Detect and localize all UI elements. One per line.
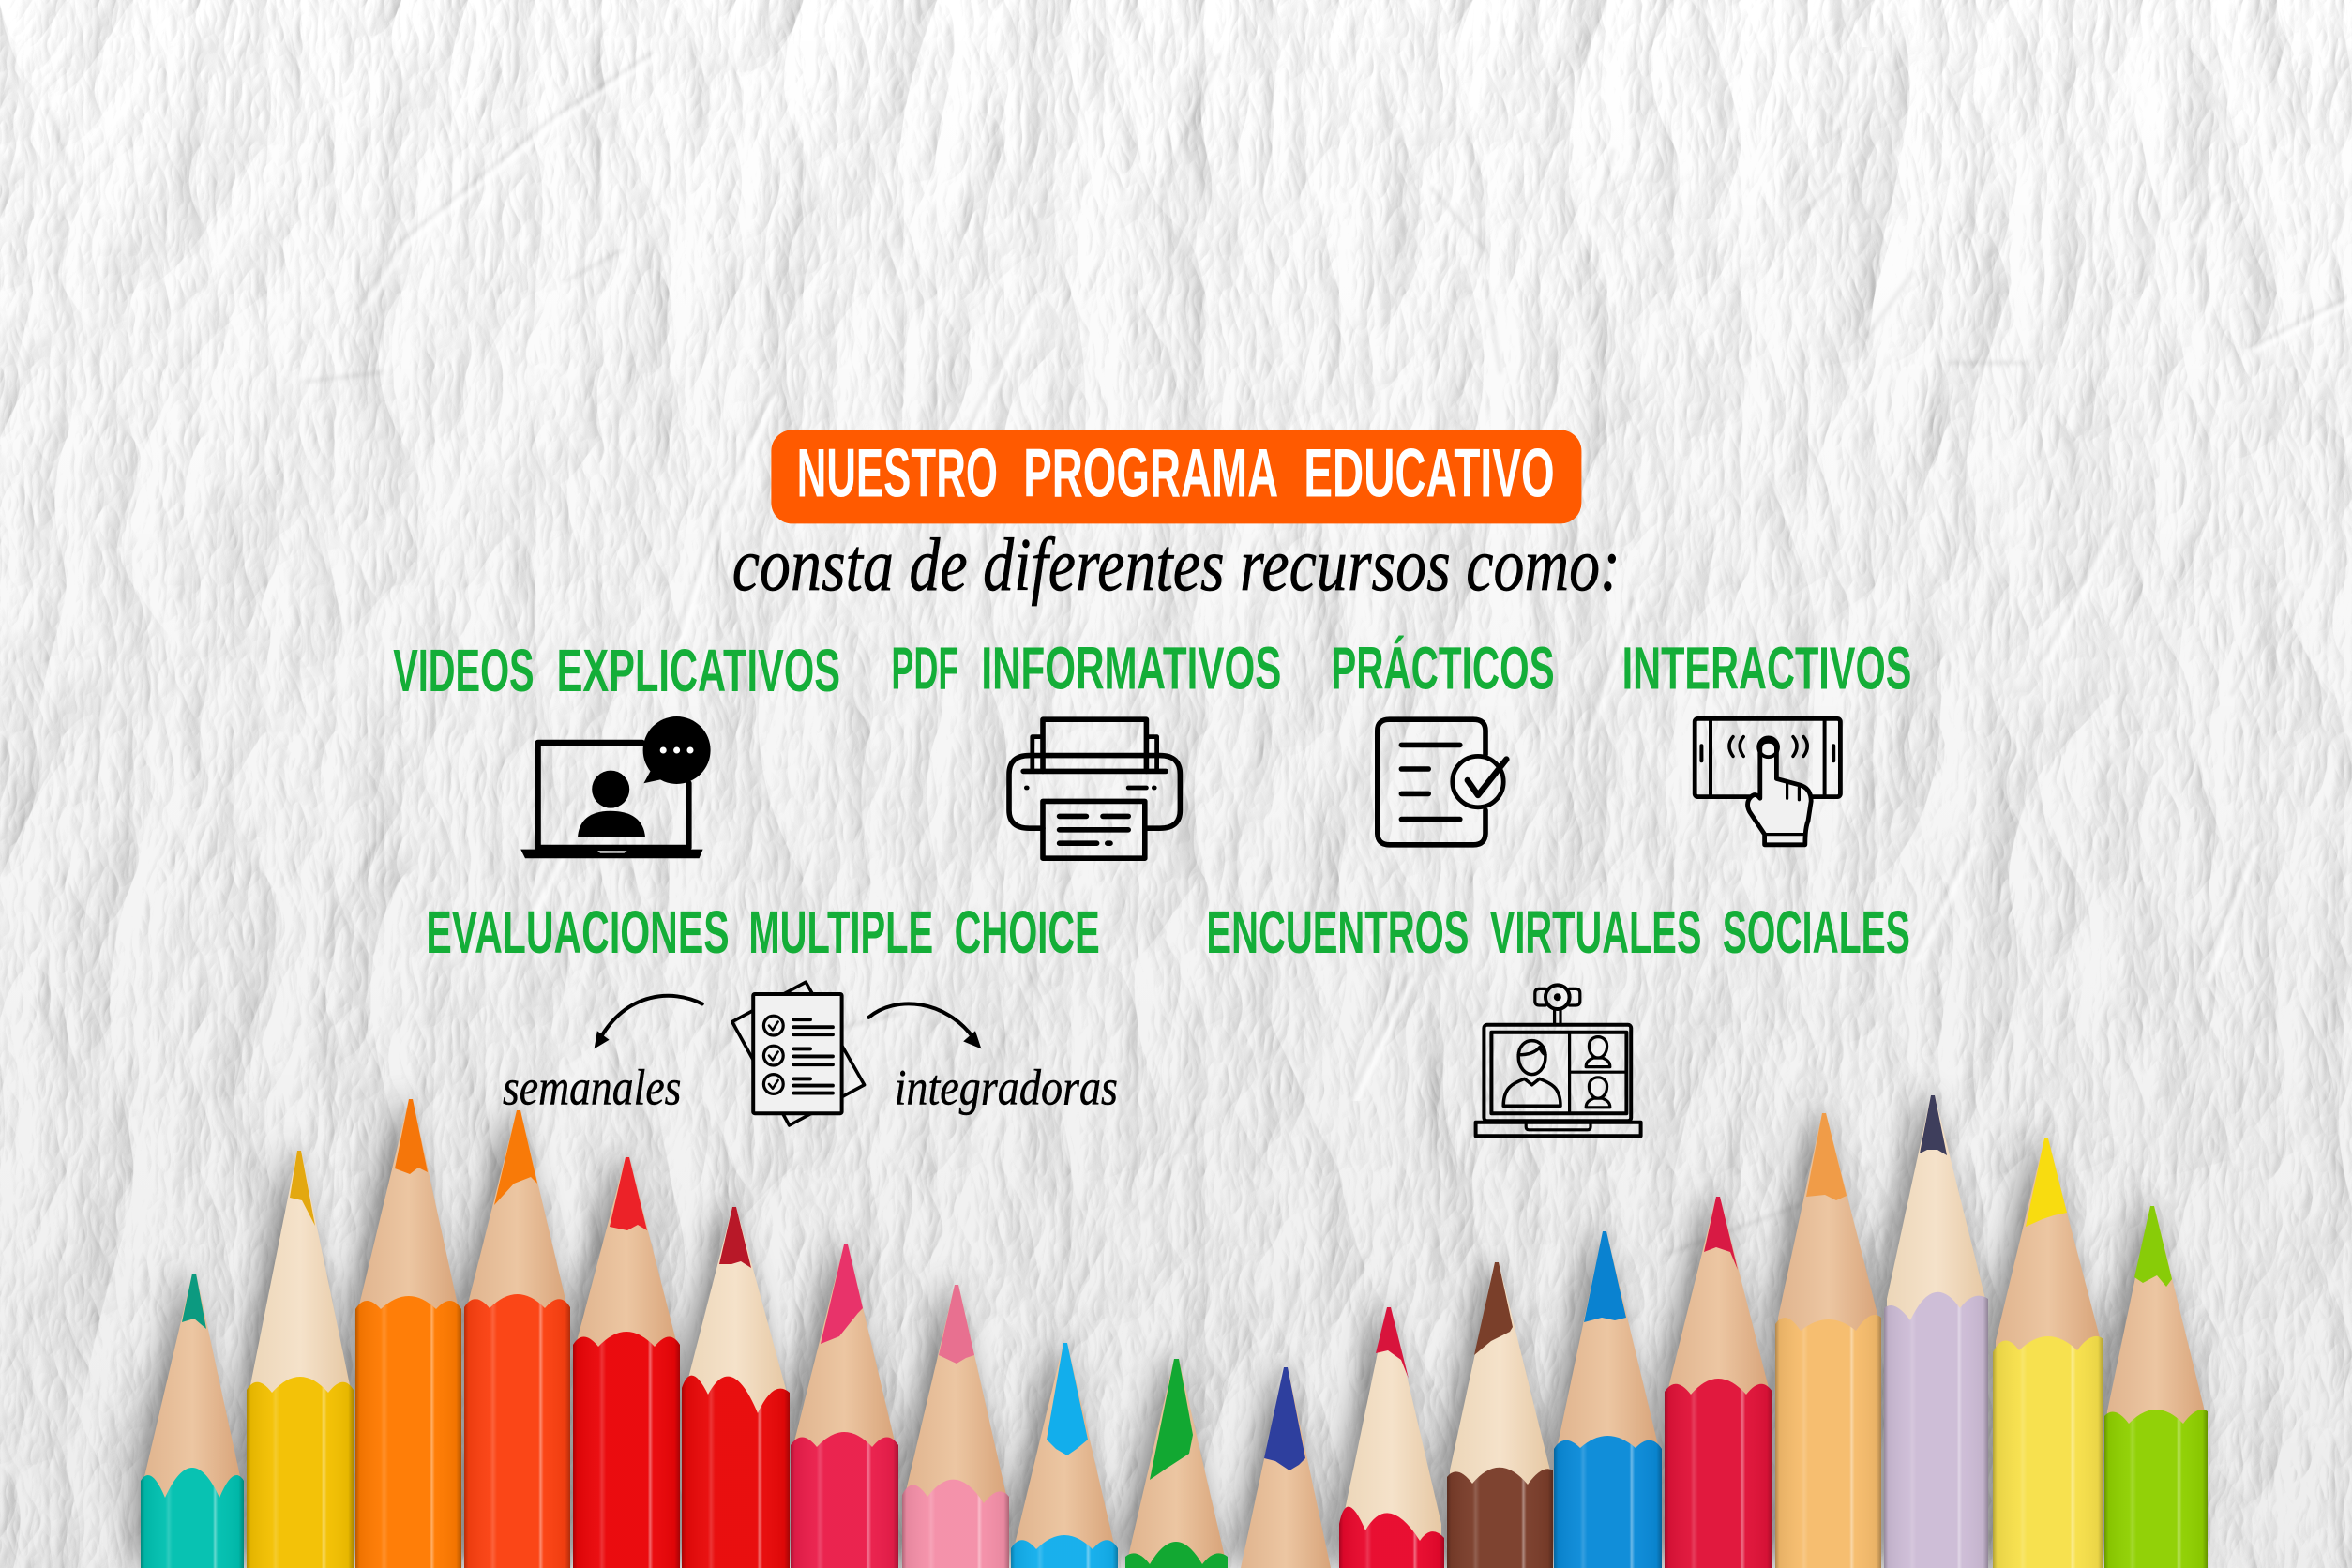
label: semanales: semanales [503, 1060, 681, 1116]
heading: encuentros virtuales sociales: ENCUENTROS [1206, 898, 1469, 966]
heading: pdf informativos: INFORMATIVOS [981, 634, 1281, 701]
heading: evaluaciones multiple choice: MULTIPLE [748, 898, 933, 966]
pencil: blue [1554, 1231, 1662, 1568]
heading: videos explicativos [393, 637, 840, 704]
pencil: teal [141, 1274, 244, 1568]
label: integradoras: integradoras [895, 1060, 1118, 1116]
pencil: pink [902, 1285, 1009, 1568]
pencil: red [573, 1157, 680, 1568]
heading: encuentros virtuales sociales [1206, 898, 1910, 966]
heading: encuentros virtuales sociales: SOCIALES [1723, 898, 1910, 966]
heading: pdf informativos: PDF [891, 634, 958, 701]
pencil: lilac [1884, 1095, 1988, 1568]
pencil: red orange [464, 1110, 570, 1568]
icon: printer [1009, 719, 1180, 858]
heading: videos explicativos: VIDEOS [393, 637, 535, 704]
arrow: to integradoras [868, 1003, 981, 1048]
title text: EDUCATIVO [1304, 434, 1555, 512]
title text: NUESTRO [797, 434, 998, 512]
heading: evaluaciones multiple choice: CHOICE [955, 898, 1100, 966]
pencil: lime [2104, 1206, 2208, 1568]
title text [797, 434, 1555, 512]
heading: interactivos: INTERACTIVOS [1622, 634, 1911, 701]
title text: PROGRAMA [1023, 434, 1278, 512]
pencil: yellow [247, 1151, 354, 1568]
icon: document with check mark [1378, 719, 1506, 845]
arrow: to semanales [595, 996, 702, 1048]
heading: pdf informativos [891, 634, 1281, 701]
heading: encuentros virtuales sociales: VIRTUALES [1490, 898, 1701, 966]
pencil: lemon [1993, 1138, 2103, 1568]
pencil: crimson [791, 1244, 898, 1568]
pencil shadows [134, 1090, 2195, 1562]
icon: laptop video call with webcam [1476, 985, 1641, 1136]
pencil: light orange [1775, 1113, 1881, 1568]
row of coloured pencils [141, 1095, 2208, 1568]
heading: prácticos: PRÁCTICOS [1331, 634, 1555, 701]
pencil: deep red [682, 1207, 790, 1568]
pencil: green [1125, 1359, 1228, 1568]
pencil: raspberry [1665, 1197, 1772, 1568]
pencil: indigo [1241, 1367, 1331, 1568]
pencil: orange [355, 1099, 461, 1568]
heading: evaluaciones multiple choice: EVALUACIONES [426, 898, 730, 966]
pencil: bright red [1339, 1307, 1444, 1568]
subtitle script: consta de diferentes recursos como: [732, 524, 1621, 607]
icon: checklist sheets [732, 982, 865, 1125]
icon: touch screen with hand [1695, 718, 1840, 845]
pencil: brown [1447, 1262, 1553, 1568]
pencil: sky blue [1011, 1343, 1118, 1568]
title pill [771, 430, 1581, 523]
icon: laptop with person and speech bubble [520, 716, 711, 858]
heading: videos explicativos: EXPLICATIVOS [557, 637, 840, 704]
